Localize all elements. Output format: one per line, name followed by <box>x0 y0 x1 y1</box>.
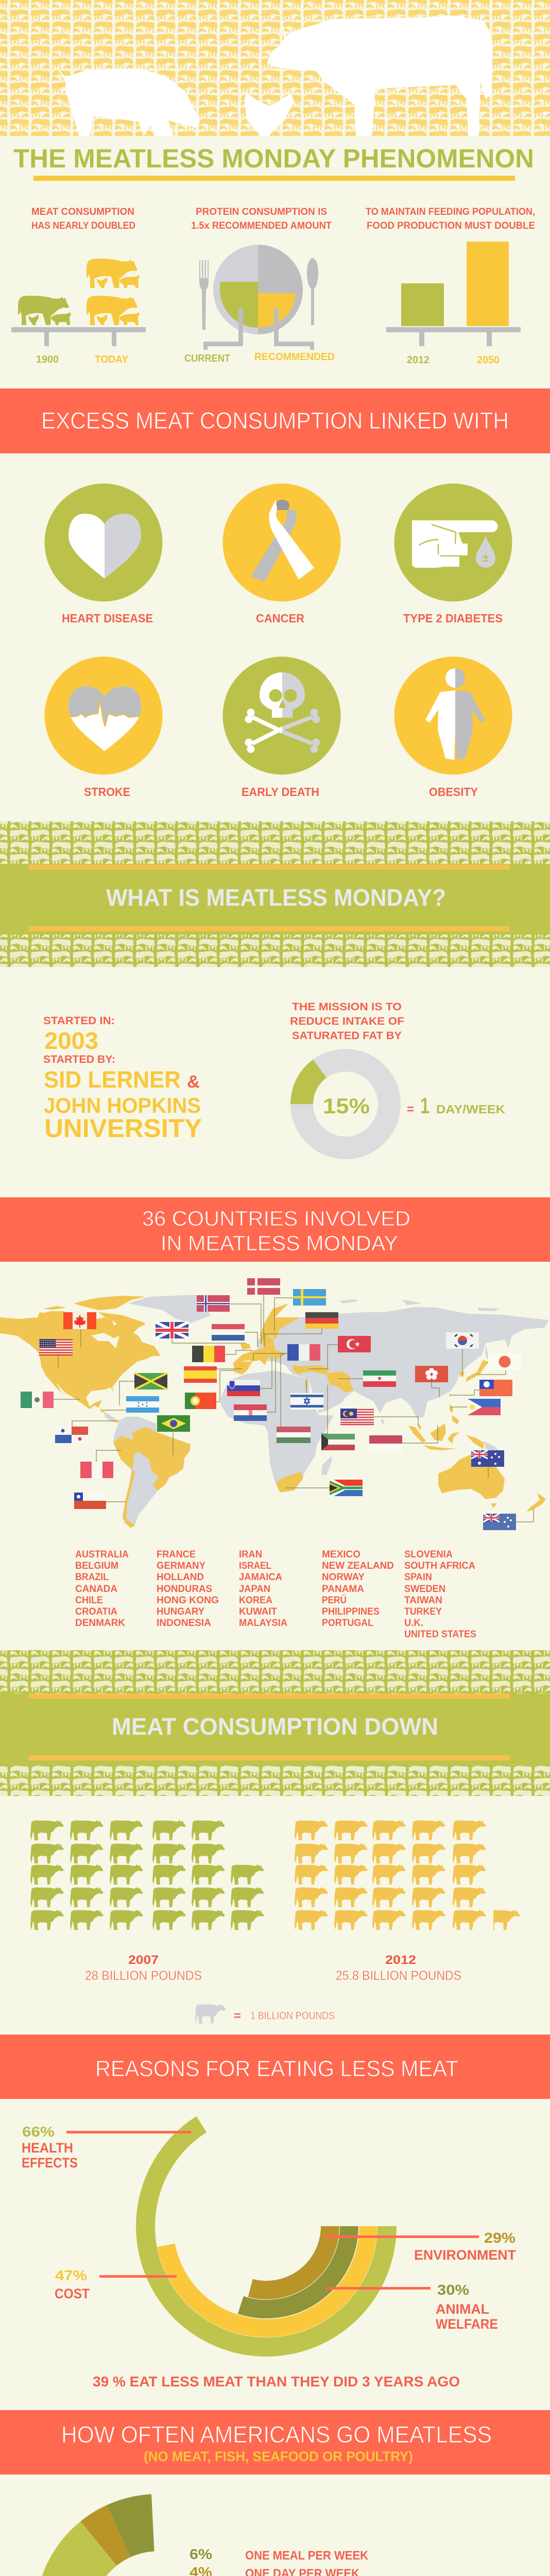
flag: Taiwan <box>479 1380 512 1396</box>
connector lines <box>54 1295 534 1522</box>
panel: health risks <box>44 483 512 799</box>
flag: Australia <box>471 1450 504 1467</box>
label: 2012: 2012 <box>385 1953 416 1967</box>
segment: one day per week <box>98 2531 118 2544</box>
column 2: HONG KONG <box>157 1595 219 1606</box>
panel: meat consumption doubled: HAS NEARLY DOUBLED <box>31 220 135 231</box>
recommended portion <box>258 293 296 328</box>
column 5: U.K. <box>404 1618 423 1629</box>
panel: started in and by: SID LERNER <box>44 1066 181 1093</box>
panel: started in and by: & <box>187 1072 200 1092</box>
label: 2007: 2007 <box>128 1953 159 1967</box>
panel: mission donut: = <box>407 1103 414 1116</box>
column 2: FRANCE <box>157 1549 196 1560</box>
icon: spoon <box>307 258 318 325</box>
column 5 <box>404 1549 476 1640</box>
column 4: PORTUGAL <box>322 1618 373 1629</box>
pig silhouette <box>56 67 200 136</box>
column 5: TAIWAN <box>404 1595 442 1606</box>
callout: 30% animal welfare: 30% <box>437 2282 469 2298</box>
icon: cancer ribbon <box>222 483 341 602</box>
flag: Mexico <box>21 1392 54 1408</box>
panel: meat consumption doubled: TODAY <box>95 354 129 365</box>
heading band: meat consumption down <box>0 1650 550 1796</box>
label: cancer: CANCER <box>256 612 304 625</box>
column 4: NEW ZEALAND <box>322 1561 394 1571</box>
column 3: JAPAN <box>239 1584 270 1595</box>
legend table: ONE MEAL PER WEEK <box>245 2549 369 2563</box>
label: heart disease: HEART DISEASE <box>62 612 153 625</box>
flag: Philippines <box>468 1399 501 1415</box>
heading band: meat consumption down: MEAT CONSUMPTION DOWN <box>112 1713 438 1740</box>
flag: United States <box>39 1339 73 1355</box>
flag: Jamaica <box>134 1373 167 1389</box>
panel: started in and by: JOHN HOPKINS <box>44 1093 201 1117</box>
connector lines <box>203 308 314 350</box>
heading band: how often: HOW OFTEN AMERICANS GO MEATLESS <box>61 2421 492 2448</box>
arc: cost 47% <box>166 2226 368 2328</box>
flag: Slovenia <box>227 1380 260 1396</box>
flag: Hong Kong <box>415 1366 448 1382</box>
panel: protein consumption plate: CURRENT <box>184 353 230 364</box>
semicircle chart: how often meatless <box>63 2523 153 2576</box>
callout: 66% health effects <box>22 2124 191 2171</box>
panel: mission donut: SATURATED FAT BY <box>292 1030 402 1042</box>
heading band: what is meatless monday: WHAT IS MEATLESS MONDAY? <box>106 884 446 911</box>
legend table <box>179 2546 507 2576</box>
label: type 2 diabetes: TYPE 2 DIABETES <box>403 612 503 625</box>
icon: heart disease <box>44 483 163 602</box>
callout: 47% cost: COST <box>55 2286 90 2301</box>
panel: meat consumption doubled <box>11 206 146 365</box>
flag: New Zealand <box>483 1514 516 1530</box>
flag: Peru <box>80 1462 113 1478</box>
column 4: PHILIPPINES <box>322 1606 380 1617</box>
flag: Denmark <box>247 1278 280 1295</box>
bar 2012 <box>401 283 444 326</box>
legend: cow equals one billion pounds <box>195 2004 335 2024</box>
flag: Holland <box>212 1324 245 1341</box>
column 3: JAMAICA <box>239 1572 282 1583</box>
panel: mission donut: 1 <box>420 1093 429 1118</box>
column 4: PANAMA <box>322 1584 364 1595</box>
flag: Germany <box>305 1312 338 1329</box>
panel: meat consumption doubled: 1900 <box>36 354 59 365</box>
callout: 30% animal welfare: ANIMAL <box>436 2301 489 2317</box>
panel: started in and by: STARTED IN: <box>43 1015 115 1027</box>
cow silhouette <box>267 15 493 136</box>
column 5: UNITED STATES <box>404 1629 476 1640</box>
arc: animal welfare 30% <box>240 2226 349 2309</box>
panel: started in and by: STARTED BY: <box>43 1054 115 1065</box>
column 5: SOUTH AFRICA <box>404 1561 475 1571</box>
column 3: IRAN <box>239 1549 262 1560</box>
flag: Turkey <box>338 1336 371 1352</box>
callout: 66% health effects: HEALTH <box>22 2140 73 2156</box>
heading band: 36 countries: IN MEATLESS MONDAY <box>161 1231 398 1255</box>
panel: food production bars: 2012 <box>407 354 429 366</box>
column 3: KUWAIT <box>239 1606 277 1617</box>
column 4: NORWAY <box>322 1572 365 1583</box>
pictogram: 2012 cows <box>295 1820 520 1930</box>
world map <box>0 1278 548 1530</box>
column 3: KOREA <box>239 1595 272 1606</box>
flag: Norway <box>197 1295 230 1312</box>
flag: South Africa <box>330 1480 363 1496</box>
callout: 47% cost <box>55 2267 177 2301</box>
flag: Israel <box>290 1393 323 1410</box>
segment: many meals <box>63 2544 98 2576</box>
flag: Croatia <box>234 1404 267 1421</box>
column 1 <box>75 1549 129 1629</box>
callout: 29% environment: 29% <box>484 2230 515 2246</box>
label: early death: EARLY DEATH <box>242 785 319 799</box>
country list <box>75 1549 476 1640</box>
panel: food production bars: TO MAINTAIN FEEDING POPULATION, <box>366 206 535 217</box>
column 1: AUSTRALIA <box>75 1549 129 1560</box>
label: 2007 <box>85 1953 202 1983</box>
pictogram: 2007 cows <box>30 1820 264 1930</box>
callout: 29% environment: ENVIRONMENT <box>414 2247 516 2263</box>
icon: early death skull <box>222 656 341 775</box>
label: 2012: 25.8 BILLION POUNDS <box>336 1969 461 1983</box>
callout: 47% cost: 47% <box>55 2267 87 2283</box>
flag: South Korea <box>446 1332 479 1349</box>
column 3 <box>239 1549 287 1629</box>
callout: 30% animal welfare <box>325 2282 498 2332</box>
shelf <box>386 327 521 346</box>
panel: food production bars <box>366 206 535 366</box>
panel: mission donut: THE MISSION IS TO <box>292 1001 402 1013</box>
column 3: ISRAEL <box>239 1561 271 1571</box>
column 1: CHILE <box>75 1595 103 1606</box>
column 3: MALAYSIA <box>239 1618 287 1629</box>
column 2: GERMANY <box>157 1561 205 1571</box>
legend: cow equals one billion pounds: 1 BILLION POUNDS <box>250 2010 335 2022</box>
icon: type 2 diabetes <box>394 483 512 602</box>
callout: 66% health effects: EFFECTS <box>22 2155 78 2171</box>
icon: fork <box>199 260 209 330</box>
callout: 66% health effects: 66% <box>22 2124 55 2140</box>
grey land <box>104 1295 548 1528</box>
heading band: how often: (NO MEAT, FISH, SEAFOOD OR POULTRY) <box>144 2449 413 2464</box>
flag: Hungary <box>277 1427 311 1443</box>
column 4 <box>322 1549 394 1629</box>
flag: Panama <box>55 1427 88 1443</box>
shelf <box>11 327 146 346</box>
column 5: SLOVENIA <box>404 1549 453 1560</box>
flag: France <box>287 1344 320 1361</box>
panel: protein consumption plate: RECOMMENDED <box>254 351 335 363</box>
panel: meat consumption doubled: MEAT CONSUMPTION <box>31 206 134 217</box>
column 2: HUNGARY <box>157 1606 204 1617</box>
column 1: BRAZIL <box>75 1572 109 1583</box>
flag: Portugal <box>185 1393 216 1409</box>
label: 2012 <box>336 1953 461 1983</box>
label: 2007: 28 BILLION POUNDS <box>85 1969 202 1983</box>
column 1: BELGIUM <box>75 1561 118 1571</box>
arc: health effects 66% <box>146 2124 387 2347</box>
heading band: reasons <box>0 2035 550 2099</box>
flag: Brazil <box>157 1415 190 1432</box>
statement: 39 percent: 39 % EAT LESS MEAT THAN THEY DID 3 YEARS AGO <box>93 2374 460 2389</box>
column 4: MEXICO <box>322 1549 360 1560</box>
column 5: SPAIN <box>404 1572 432 1583</box>
flag: Honduras <box>126 1396 159 1413</box>
panel: started in and by: 2003 <box>44 1027 98 1054</box>
icon: stroke <box>44 656 163 775</box>
panel: started in and by: UNIVERSITY <box>44 1114 202 1143</box>
donut chart 15% <box>302 1060 389 1148</box>
flag: Japan <box>488 1353 521 1370</box>
chicken silhouette <box>245 92 294 136</box>
title rule <box>33 176 515 181</box>
icon: type 2 diabetes: ± <box>483 551 489 564</box>
panel: food production bars: FOOD PRODUCTION MUST DOUBLE <box>367 220 535 231</box>
callout: 29% environment <box>325 2230 516 2263</box>
column 1: CROATIA <box>75 1606 117 1617</box>
icon: yellow animals today <box>87 296 140 325</box>
panel: protein consumption plate <box>184 206 335 364</box>
column 2: HOLLAND <box>157 1572 204 1583</box>
column 1: DENMARK <box>75 1618 125 1629</box>
legend: cow equals one billion pounds: = <box>234 2009 241 2022</box>
column 2 <box>157 1549 219 1629</box>
column 5: SWEDEN <box>404 1584 445 1595</box>
heading band: reasons: REASONS FOR EATING LESS MEAT <box>95 2056 458 2081</box>
flag: Kuwait <box>321 1434 355 1450</box>
panel: food production bars: 2050 <box>477 354 500 366</box>
heading band: excess meat: EXCESS MEAT CONSUMPTION LINKED WITH <box>41 408 509 434</box>
plate <box>213 245 303 334</box>
flag: Belgium <box>192 1346 225 1362</box>
bar 2050 <box>467 242 509 326</box>
column 4: PERÚ <box>322 1595 347 1606</box>
label: stroke: STROKE <box>84 785 130 799</box>
header pattern with animals <box>0 0 550 136</box>
panel: mission donut: DAY/WEEK <box>436 1103 505 1116</box>
icon: yellow animals today top <box>87 259 140 288</box>
flag: Canada <box>63 1312 96 1329</box>
panel: protein consumption plate: PROTEIN CONSUMPTION IS <box>196 206 327 217</box>
main title: THE MEATLESS MONDAY PHENOMENON <box>13 144 534 173</box>
flag: United Kingdom <box>156 1322 188 1338</box>
flag: Indonesia <box>369 1435 402 1452</box>
column 2: INDONESIA <box>157 1618 211 1629</box>
current portion <box>220 282 258 328</box>
blood drop <box>476 536 495 568</box>
panel: mission donut <box>290 1001 505 1148</box>
flag: Malaysia <box>340 1409 374 1425</box>
segment: one meal per week <box>118 2523 153 2531</box>
panel: started in and by <box>43 1015 202 1143</box>
heading band: 36 countries: 36 COUNTRIES INVOLVED <box>142 1207 410 1230</box>
callout: 30% animal welfare: WELFARE <box>436 2316 498 2332</box>
icon: obesity <box>394 656 512 775</box>
heading band: 36 countries <box>0 1197 550 1262</box>
radial chart: reasons for eating less meat <box>146 2124 387 2347</box>
yellow land <box>0 1296 546 1528</box>
heading band: what is meatless monday <box>0 821 550 967</box>
column 1: CANADA <box>75 1584 117 1595</box>
flag: Iran <box>363 1370 396 1387</box>
column 5: TURKEY <box>404 1606 442 1617</box>
panel: mission donut: REDUCE INTAKE OF <box>290 1015 404 1027</box>
heading band: how often <box>0 2410 550 2475</box>
panel: mission donut: 15% <box>323 1094 370 1118</box>
flag: Spain <box>184 1366 217 1383</box>
heading band: excess meat <box>0 388 550 453</box>
flag: Chile <box>74 1493 106 1509</box>
icon: green animals 1900 <box>18 296 71 325</box>
arc: environment 29% <box>250 2226 330 2290</box>
flag: Sweden <box>293 1289 326 1306</box>
panel: protein consumption plate: 1.5x RECOMMENDED AMOUNT <box>191 220 332 231</box>
column 2: HONDURAS <box>157 1584 212 1595</box>
label: obesity: OBESITY <box>429 785 478 799</box>
legend table: 6% <box>190 2546 212 2562</box>
